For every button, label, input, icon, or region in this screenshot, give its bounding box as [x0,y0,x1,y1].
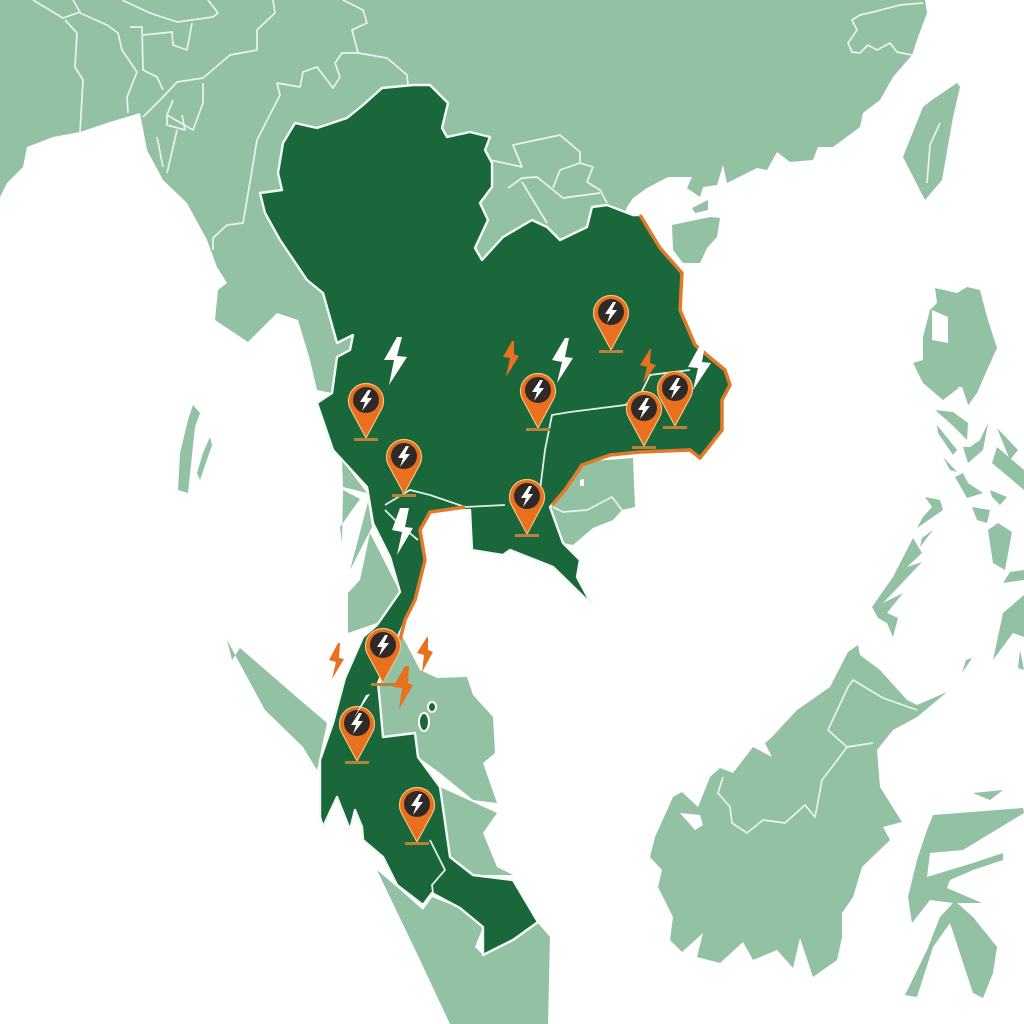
lightning bolt: white slash over pin [354,694,370,718]
map pin [594,295,628,353]
internal borders: white [385,370,690,893]
land: Borneo [650,645,947,977]
region: main northern and eastern territory [260,85,730,955]
lightning bolt: orange [417,637,433,672]
lightning bolt: orange [503,341,519,377]
lightning bolt: orange [640,349,656,383]
land: Palawan north [917,497,943,528]
lightning bolt: white [552,338,573,383]
map pin [510,479,544,537]
map pin [366,628,400,686]
map pin [348,383,384,441]
land: Palawan north islet [920,530,933,547]
map pin [626,391,662,449]
white lakes and bays [580,310,970,830]
lightning bolt: white [392,508,413,555]
map pin [658,371,692,429]
highlighted country: dark green [260,85,730,955]
land: west coastal strip four [348,533,400,633]
land: Andaman islands [178,405,212,493]
land: Luzon [913,287,997,407]
land: west coastal strip one [342,460,367,493]
map pin [520,373,556,431]
land: central peninsula [378,632,497,803]
land: mainland Asia [0,0,927,393]
lightning bolt: orange [329,643,344,679]
land: Philippine islands [935,410,1024,673]
land: Sulawesi [905,808,1024,998]
lightning bolt: white [688,345,711,390]
lightning bolt: white [384,337,407,385]
land: Taiwan [903,83,960,200]
land: Sulawesi north islet [973,790,1003,800]
land: small gulf island [692,200,708,213]
land: west coastal strip three [350,502,372,570]
land: west coast peninsula [227,640,327,770]
map pin [386,439,422,497]
land: southern peninsula [440,787,513,875]
land: southern mainland [377,870,550,1024]
map pin [400,787,434,845]
lightning bolt: large orange [393,666,413,709]
coastline: orange [400,215,730,640]
islands: dark green [419,702,436,731]
land: Palawan [872,538,922,637]
map pin [340,706,374,764]
land: southern Indochina [547,458,635,545]
land: west coastal strip two [340,490,360,543]
land: Hainan [672,217,720,263]
internal light borders [33,0,940,833]
